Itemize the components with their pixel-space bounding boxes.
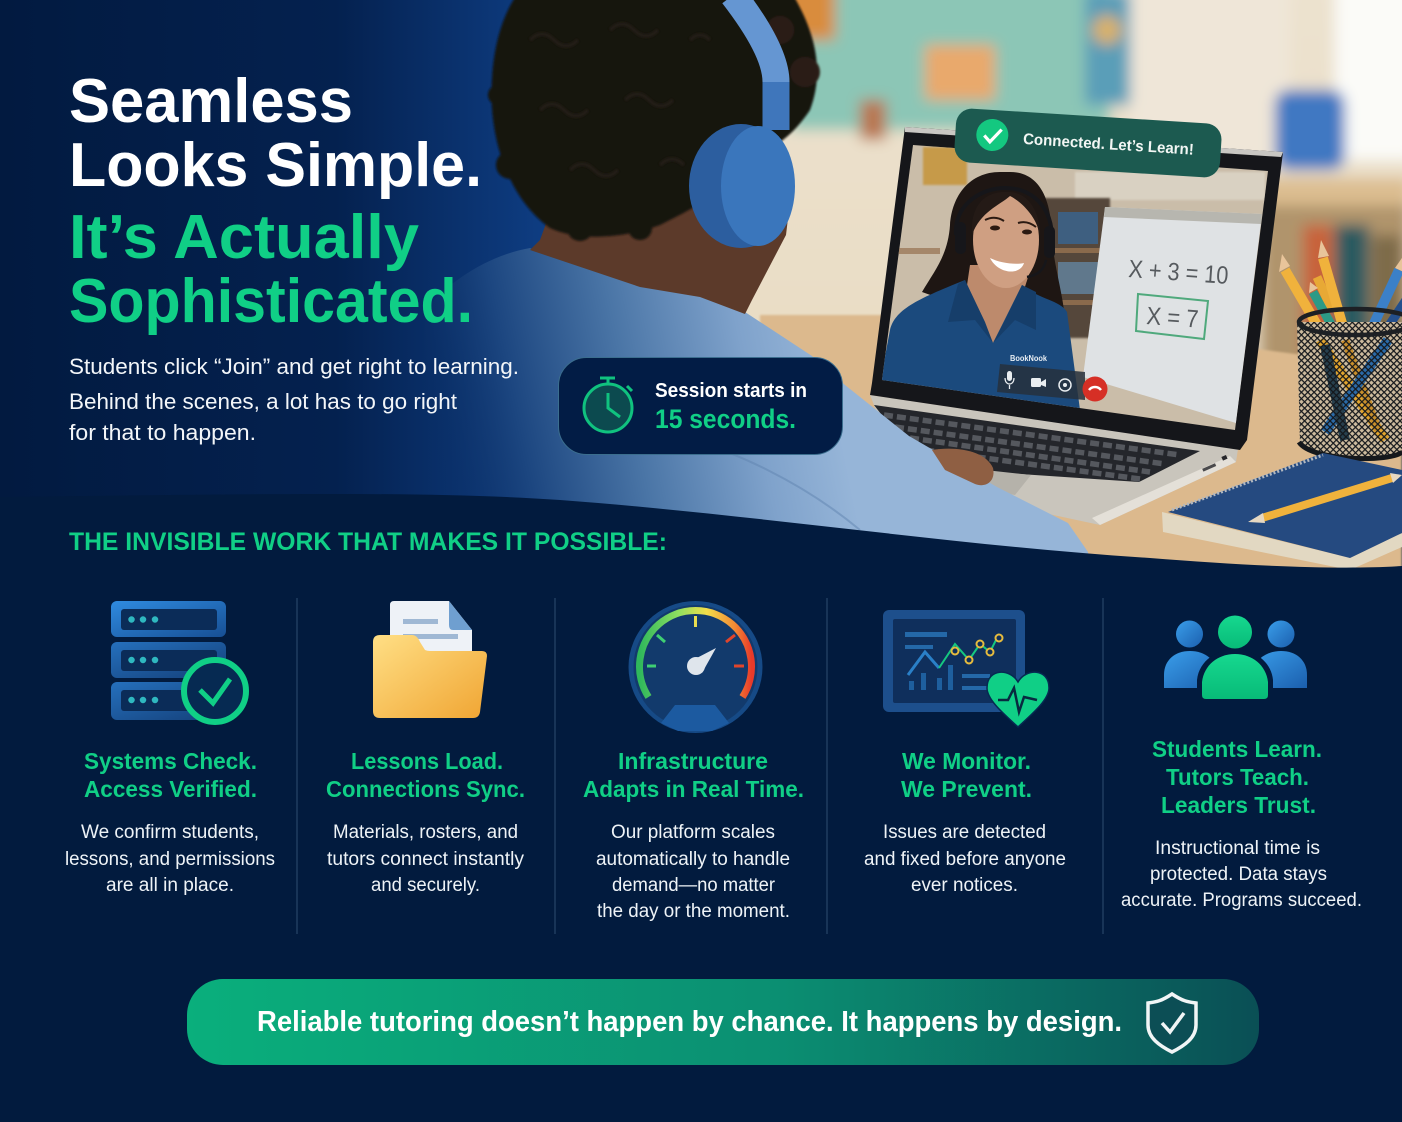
description: ever notices. [911, 875, 1018, 896]
heading: Leaders Trust. [1161, 792, 1316, 818]
navy wave lower panel [0, 494, 1402, 1122]
panel: lessons load [326, 601, 525, 896]
description: Materials, rosters, and [333, 822, 518, 843]
title: It’s Actually [69, 203, 420, 272]
heading [1152, 736, 1322, 818]
intro text: Students click “Join” and get right to learning. [69, 354, 519, 379]
curly hair [488, 0, 820, 241]
description: automatically to handle [596, 849, 790, 870]
description: Instructional time is [1155, 838, 1320, 859]
heading: Tutors Teach. [1166, 764, 1309, 790]
neck [530, 185, 792, 314]
description: and securely. [371, 875, 480, 896]
description: accurate. Programs succeed. [1121, 890, 1362, 911]
icon: stopwatch [584, 378, 632, 432]
heading [583, 748, 804, 802]
description: Our platform scales [611, 822, 775, 843]
description [864, 822, 1066, 896]
student seen from behind [420, 0, 1090, 600]
description: lessons, and permissions [65, 849, 275, 870]
shirt [420, 248, 1090, 600]
icon: speedometer gauge [628, 601, 762, 733]
icon: green check [975, 118, 1009, 152]
icon: shield check [1148, 994, 1196, 1052]
intro text: Behind the scenes, a lot has to go right [69, 389, 457, 414]
description [327, 822, 525, 896]
heading: Infrastructure [618, 748, 768, 774]
tutor [880, 172, 1080, 410]
session timer badge: 15 seconds. [655, 404, 796, 434]
description: protected. Data stays [1150, 864, 1327, 885]
description: demand—no matter [612, 875, 776, 896]
panel: outcomes [1121, 616, 1362, 911]
description: the day or the moment. [597, 901, 790, 922]
panel: systems check [65, 601, 275, 896]
description: We confirm students, [81, 822, 259, 843]
heading: Connections Sync. [326, 776, 525, 802]
blurred classroom background [700, 0, 1402, 400]
heading [326, 748, 525, 802]
title: Looks Simple. [69, 131, 482, 200]
heading [901, 748, 1032, 802]
hero backdrop gradient [0, 0, 720, 520]
description [596, 822, 790, 922]
icon: folder with document [373, 601, 487, 718]
description: Issues are detected [883, 822, 1046, 843]
callout banner: Reliable tutoring doesn’t happen by chance. It happens by design. [257, 1006, 1122, 1038]
pencil [1248, 473, 1402, 523]
video call toolbar [997, 364, 1108, 402]
title: Seamless [69, 67, 353, 136]
heading: Lessons Load. [351, 748, 503, 774]
callout banner [187, 979, 1259, 1065]
title [69, 67, 482, 336]
description [1121, 838, 1362, 911]
description [65, 822, 275, 896]
connected banner [954, 108, 1222, 178]
laptop [860, 127, 1283, 525]
heading: Access Verified. [84, 776, 257, 802]
heading [84, 748, 257, 802]
heading: Systems Check. [84, 748, 257, 774]
keyboard [874, 405, 1200, 495]
title: Sophisticated. [69, 267, 473, 336]
whiteboard: X + 3 = 10 [1128, 255, 1229, 290]
laptop screen with tutor [882, 145, 1268, 430]
heading: We Monitor. [902, 748, 1031, 774]
panel: monitoring [864, 610, 1066, 896]
icon: dashboard with heart [883, 610, 1049, 727]
pencils above the rim [1279, 240, 1402, 330]
intro text [69, 354, 519, 445]
description: and fixed before anyone [864, 849, 1066, 870]
icon: servers with check [111, 601, 246, 722]
pencil cup [1279, 240, 1402, 459]
hand [932, 449, 994, 485]
whiteboard: X = 7 [1146, 302, 1199, 334]
wooden desk [760, 315, 1402, 580]
heading: Adapts in Real Time. [583, 776, 804, 802]
description: are all in place. [106, 875, 234, 896]
description: tutors connect instantly [327, 849, 525, 870]
laptop lid [870, 127, 1283, 450]
icon: three people [1164, 616, 1307, 700]
headphones [689, 0, 795, 248]
heading: Students Learn. [1152, 736, 1322, 762]
whiteboard [1083, 207, 1262, 423]
session timer badge: Session starts in [655, 380, 807, 402]
section heading: THE INVISIBLE WORK THAT MAKES IT POSSIBLE: [69, 528, 667, 556]
notebook and pencil [1162, 453, 1402, 570]
heading: We Prevent. [901, 776, 1032, 802]
shirt logo text: BookNook [1010, 354, 1048, 363]
laptop base [870, 395, 1238, 525]
session timer badge [558, 358, 842, 454]
connected banner: Connected. Let’s Learn! [1023, 131, 1194, 159]
panel: infrastructure [583, 601, 804, 922]
intro text: for that to happen. [69, 420, 256, 445]
